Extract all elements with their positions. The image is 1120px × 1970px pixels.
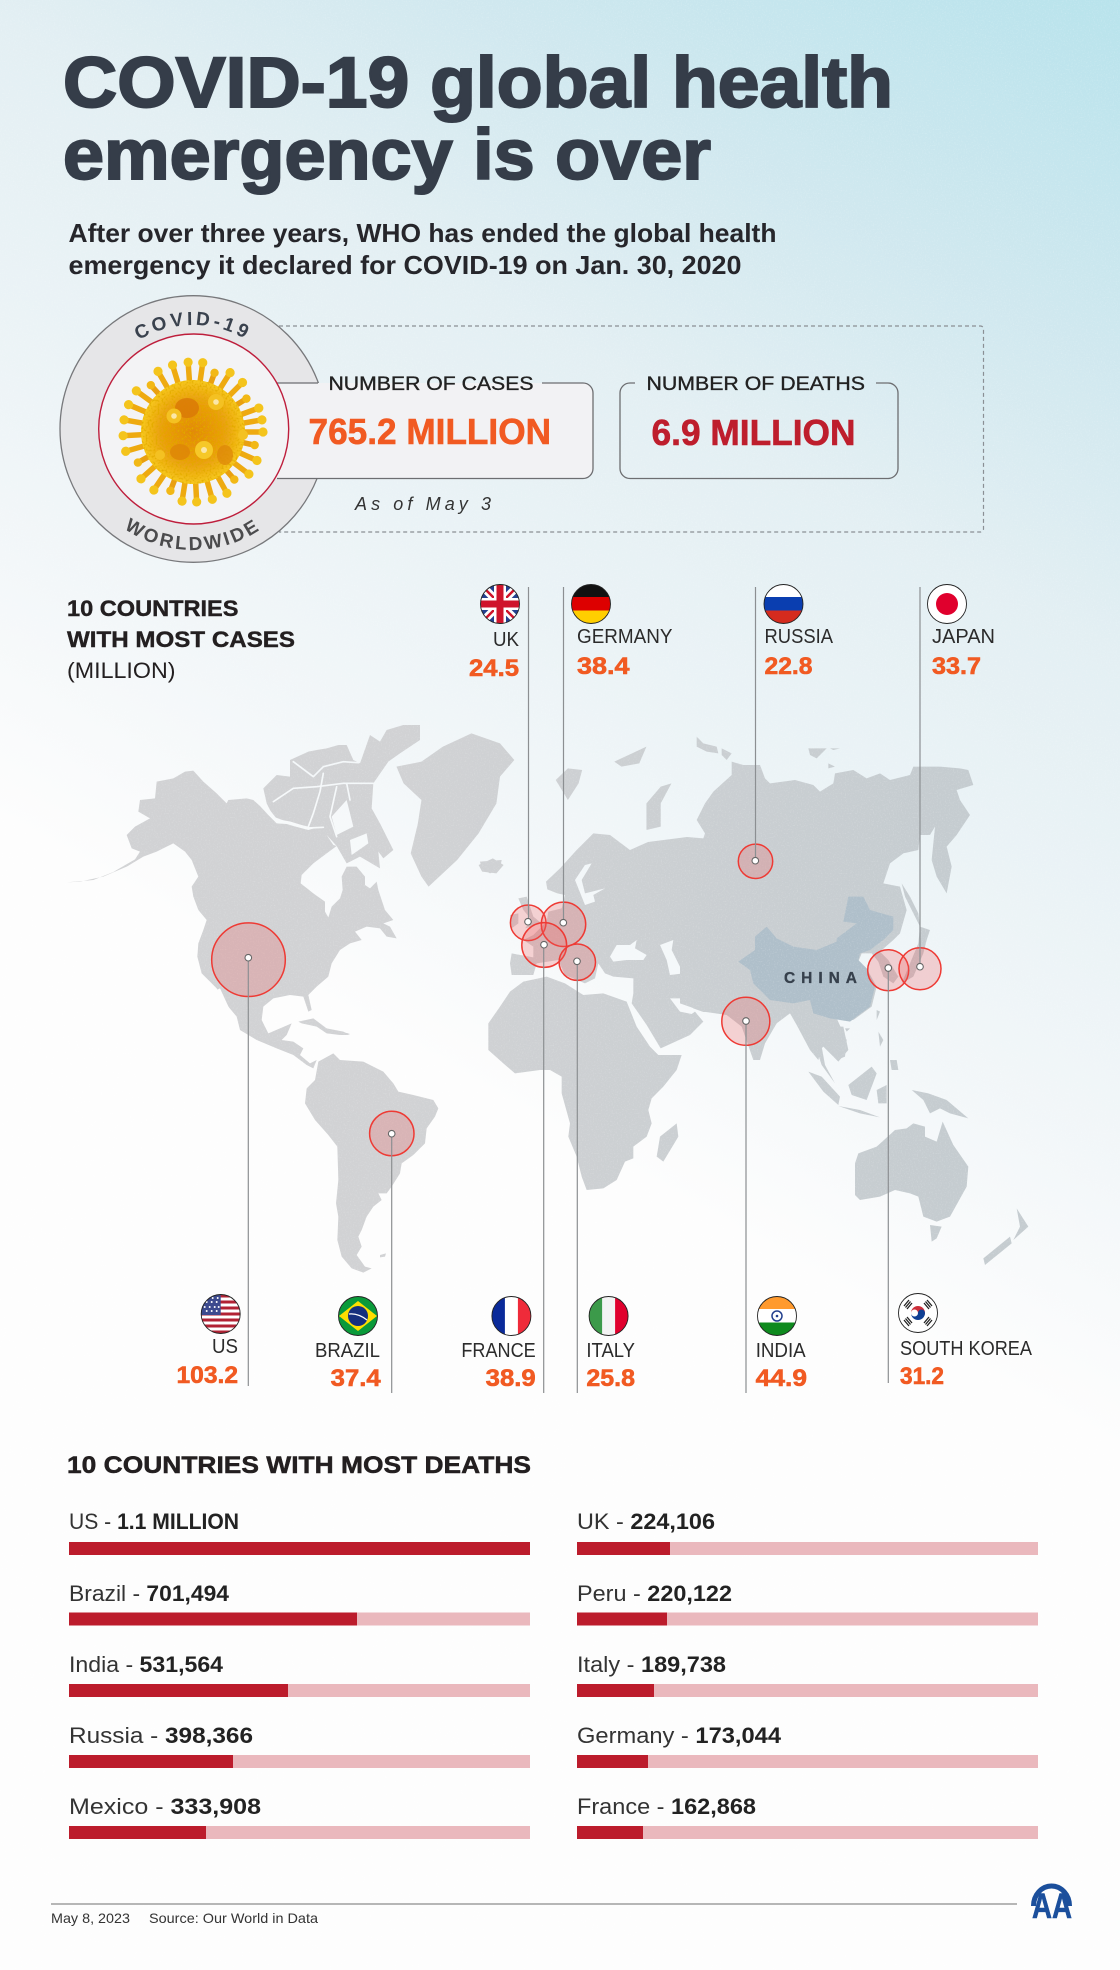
badge text: WORLDWIDE: WORLDWIDE (126, 518, 259, 550)
icon: US flag (201, 1294, 241, 1334)
bar: UK (577, 1509, 1038, 1555)
country: Italy: ITALY (586, 1340, 635, 1362)
bar: Italy: Italy - 189,738 (577, 1652, 726, 1677)
panel: number of deaths: 6.9 MILLION (652, 412, 856, 453)
bar: Brazil: Brazil - 701,494 (69, 1581, 229, 1606)
icon: Russia flag (764, 584, 804, 624)
dashed frame (279, 326, 984, 532)
bar: Russia (69, 1723, 530, 1768)
subtitle: emergency it declared for COVID-19 on Jan. 30, 2020 (68, 250, 742, 280)
bar: Peru: Peru - 220,122 (577, 1581, 732, 1606)
bar: US: US - 1.1 MILLION (69, 1509, 239, 1534)
footer date and source: May 8, 2023 (51, 1910, 130, 1926)
case markers (212, 587, 941, 1393)
worldwide badge ring (60, 296, 327, 562)
bar: Italy (577, 1652, 1038, 1697)
badge text: COVID-19 (135, 312, 248, 338)
country: US: 103.2 (176, 1362, 238, 1389)
country: Germany: GERMANY (577, 626, 672, 648)
country: South Korea (898, 1294, 1033, 1390)
bar: India: India - 531,564 (69, 1652, 223, 1677)
subtitle: After over three years, WHO has ended the global health (68, 218, 776, 248)
country: US (176, 1294, 241, 1389)
icon: virus (118, 357, 268, 507)
country: UK: 24.5 (469, 655, 519, 682)
country: Japan: JAPAN (932, 626, 995, 648)
country: France: FRANCE (461, 1340, 536, 1362)
panel: number of deaths: NUMBER OF DEATHS (646, 374, 865, 395)
country: South Korea: SOUTH KOREA (900, 1338, 1033, 1360)
title: emergency is over (63, 116, 711, 195)
country: France (461, 1296, 536, 1392)
bar chart: deaths right column (577, 1509, 1038, 1839)
panel: number of cases: 765.2 MILLION (308, 411, 551, 452)
bar: Germany: Germany - 173,044 (577, 1723, 781, 1748)
world map (60, 720, 1040, 1290)
country: UK: UK (493, 629, 520, 651)
country: Brazil (315, 1296, 381, 1392)
bar: Russia: Russia - 398,366 (69, 1723, 253, 1748)
country: Italy (586, 1296, 635, 1392)
bar: India (69, 1652, 530, 1697)
bar: US (69, 1509, 530, 1555)
icon: France flag (491, 1296, 532, 1336)
country: India (756, 1296, 807, 1392)
bar chart: deaths left column (69, 1509, 530, 1839)
bar: Mexico: Mexico - 333,908 (69, 1794, 261, 1819)
country: UK (469, 584, 520, 682)
footer date and source: Source: Our World in Data (149, 1910, 318, 1926)
title (63, 44, 893, 195)
footer date and source (51, 1910, 318, 1926)
country: Russia (764, 584, 834, 680)
bar: Brazil (69, 1581, 530, 1626)
map label: China: CHINA (784, 970, 857, 987)
country: Japan: 33.7 (932, 653, 981, 680)
heading: countries with most cases: 10 COUNTRIES (67, 596, 238, 621)
country: India: 44.9 (756, 1365, 807, 1392)
icon: Japan flag (928, 584, 966, 624)
heading: countries with most cases: WITH MOST CASES (67, 627, 295, 652)
panel: number of cases (240, 374, 593, 478)
as of date note: As of May 3 (354, 494, 491, 514)
icon: UK flag (480, 584, 520, 624)
logo: Anadolu Agency: AA (1032, 1887, 1072, 1926)
heading: countries with most deaths: 10 COUNTRIES WITH MOST DEATHS (67, 1452, 531, 1479)
icon: South Korea flag (898, 1294, 938, 1332)
heading: countries with most cases: (MILLION) (67, 658, 176, 683)
icon: Germany flag (571, 584, 611, 624)
country: Russia: RUSSIA (764, 626, 834, 648)
title: COVID-19 global health (63, 44, 893, 123)
bar: France: France - 162,868 (577, 1794, 756, 1819)
map highlight: China (738, 897, 893, 1022)
badge: inner circle with virus (99, 334, 289, 524)
bar: France (577, 1794, 1038, 1839)
panel: number of deaths (620, 374, 898, 478)
country: France: 38.9 (486, 1365, 536, 1392)
bar: Mexico (69, 1794, 530, 1839)
country: Russia: 22.8 (764, 653, 812, 680)
country: US: US (212, 1336, 238, 1358)
subtitle (68, 218, 776, 280)
bar: Germany (577, 1723, 1038, 1768)
icon: Brazil flag (338, 1296, 378, 1336)
bar: Peru (577, 1581, 1038, 1626)
heading: countries with most cases (67, 596, 295, 683)
country: Germany (571, 584, 672, 680)
bar: UK: UK - 224,106 (577, 1509, 715, 1534)
country: India: INDIA (756, 1340, 806, 1362)
country: Brazil: BRAZIL (315, 1340, 380, 1362)
badge text: COVID-19: COVID-19 (135, 312, 248, 338)
country: Germany: 38.4 (577, 653, 630, 680)
country: Brazil: 37.4 (331, 1365, 381, 1392)
icon: Italy flag (589, 1296, 629, 1336)
icon: India flag (757, 1296, 797, 1336)
country: South Korea: 31.2 (900, 1363, 944, 1390)
country: Italy: 25.8 (586, 1365, 635, 1392)
country: Japan (928, 584, 995, 680)
panel: number of cases: NUMBER OF CASES (328, 374, 534, 395)
